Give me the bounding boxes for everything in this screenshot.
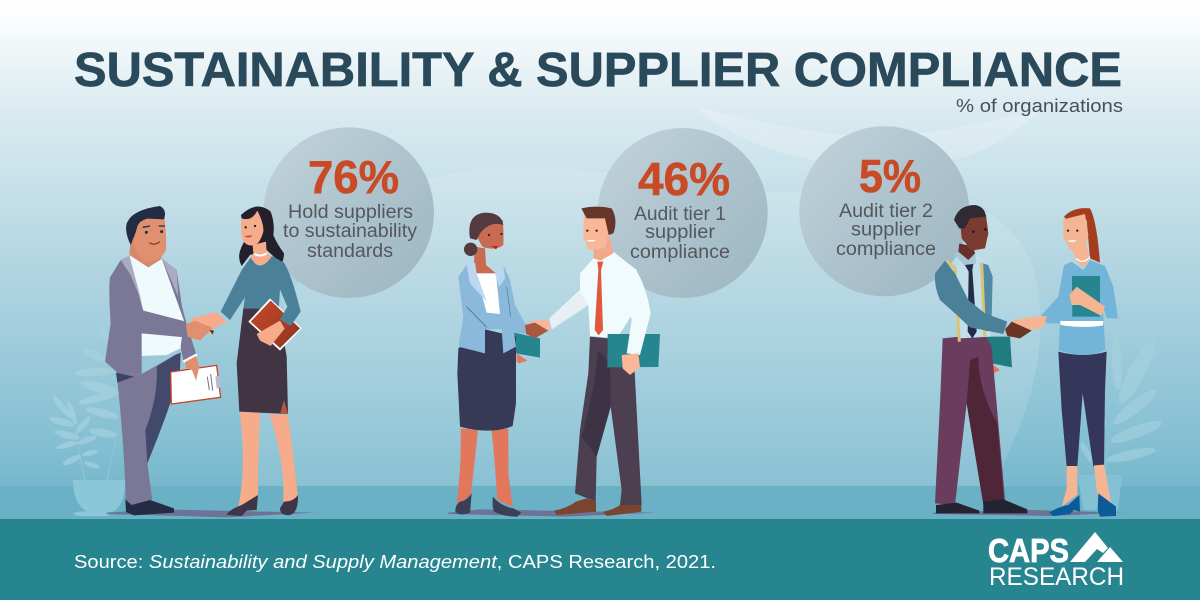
man 2 shirt: [549, 252, 640, 338]
woman 1 arm: [273, 258, 301, 326]
woman 2 skirt: [457, 329, 516, 431]
man 1 jacket: [105, 256, 186, 375]
handshake hands: [192, 312, 227, 334]
logo: CAPS Research: [988, 532, 1124, 591]
man 2 sleeve: [625, 268, 651, 355]
stat bubble: 76%: to sustainability: [283, 221, 418, 242]
woman 1 book: [248, 298, 302, 351]
handshake pair 3: [933, 205, 1122, 517]
folder behind woman 2: [514, 333, 540, 358]
woman 1 skirt: [237, 308, 288, 414]
stat bubble: 5%: Audit tier 2: [839, 201, 933, 222]
woman 3 hand: [1069, 287, 1105, 316]
left plant decoration: [49, 320, 125, 516]
stat bubble: 76%: Hold suppliers: [288, 202, 413, 223]
woman 2 legs: [457, 428, 513, 507]
floor band: [0, 486, 1200, 519]
folder behind man 3: [987, 337, 1012, 367]
woman 3 folder: [1072, 276, 1100, 317]
man 2 shoes: [554, 498, 641, 516]
man 3 torso: [955, 253, 993, 338]
woman 1 hair: [239, 207, 284, 266]
woman 2 neck and head: [474, 247, 496, 274]
stat bubble: 76%: standards: [307, 241, 393, 262]
logo: CAPS Research: CAPS: [988, 532, 1069, 569]
man 3 sleeve: [935, 261, 1007, 334]
woman 1 legs: [237, 412, 298, 510]
footer band: [0, 519, 1200, 600]
woman 1 shoes: [227, 495, 298, 516]
stat bubble: 76%: 76%: [308, 151, 399, 203]
stat bubble: 5%: supplier: [851, 220, 922, 240]
title: SUSTAINABILITY & SUPPLIER COMPLIANCE: [74, 44, 1122, 97]
stat bubble: 46%: [598, 128, 768, 298]
stat bubble: 5%: compliance: [836, 239, 936, 260]
handshake 3 hands: [1011, 316, 1047, 330]
man 2 tie: [595, 262, 603, 335]
woman 1 top: [221, 256, 284, 320]
clipboard: [171, 365, 221, 404]
background light shapes: [254, 108, 1041, 486]
stat bubble: 46%: compliance: [630, 242, 730, 263]
handshake pair 2: [448, 207, 660, 517]
woman 3 top: [1042, 260, 1118, 355]
man 1 lower hand: [185, 356, 199, 381]
man 1 head: [129, 240, 162, 267]
logo: CAPS Research: RESEARCH: [989, 563, 1124, 591]
man 2 head: [593, 237, 613, 261]
man 3 shoes: [936, 499, 1027, 513]
man 3 head: [958, 243, 975, 260]
man 1 trousers: [117, 355, 175, 509]
man 2 hand: [622, 353, 640, 375]
stat bubble: 46%: supplier: [645, 222, 716, 243]
stat bubble: 5%: [799, 126, 969, 296]
man 3 trousers: [935, 334, 1005, 505]
handshake pair 1: [105, 206, 315, 517]
woman 3 leggings: [1058, 352, 1107, 467]
right plant decoration: [1078, 335, 1163, 510]
woman 1 hand: [257, 321, 285, 346]
stat bubble: 46%: Audit tier 1: [634, 204, 726, 225]
woman 1 head and neck: [250, 242, 273, 265]
man 1 shirt: [129, 255, 184, 356]
woman 3 hair: [1064, 208, 1100, 263]
woman 3 neck and face: [1072, 243, 1090, 268]
source note: Source: Sustainability and Supply Management , CAPS Research, 2021.: [74, 551, 716, 572]
woman 2 shoes: [455, 493, 521, 517]
woman 3 shoes: [1049, 493, 1116, 517]
stat bubble: 76%: [263, 127, 434, 298]
handshake 2 hands: [529, 319, 552, 332]
man 1 shoes: [125, 499, 174, 515]
stat bubble: 46%: 46%: [638, 153, 730, 205]
stat bubble: 5%: 5%: [859, 150, 921, 202]
man 3 braces and tie: [947, 261, 985, 342]
man 2 folder: [607, 334, 660, 367]
woman 2 jacket: [458, 265, 526, 353]
subtitle: % of organizations: [956, 96, 1123, 116]
woman 3 legs: [1062, 465, 1112, 507]
man 2 trousers: [575, 337, 642, 505]
